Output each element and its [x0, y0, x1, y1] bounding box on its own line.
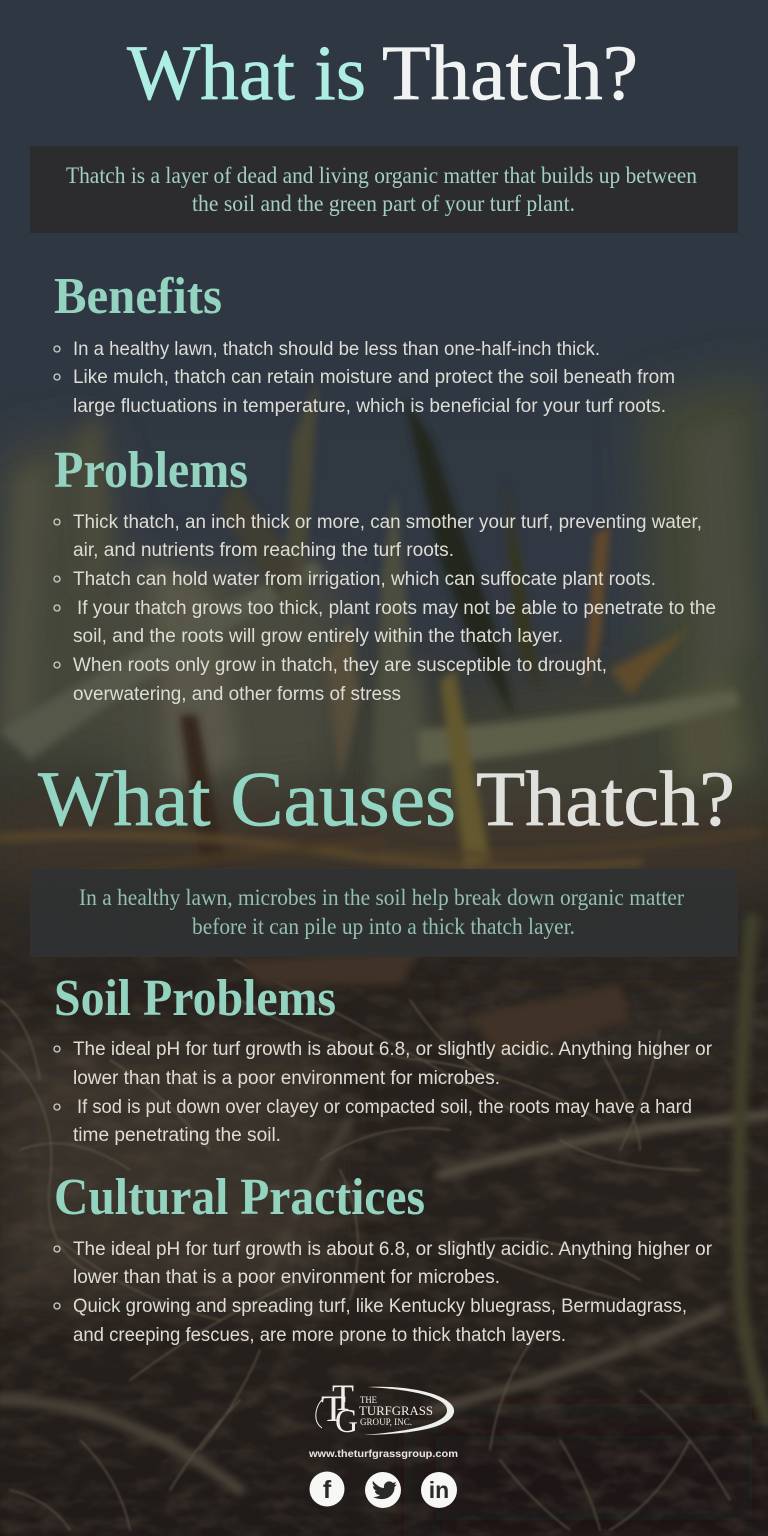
icon: twitter	[365, 1472, 401, 1508]
logo: The Turfgrass Group, Inc.	[316, 1378, 454, 1440]
panel: microbes explanation: In a healthy lawn, microbes in the soil help break down organic matter	[79, 885, 684, 910]
list: benefits: Like mulch, thatch can retain moisture and protect the soil beneath from	[73, 367, 675, 388]
logo: The Turfgrass Group, Inc.: GROUP, INC.	[360, 1418, 412, 1428]
title: What Causes Thatch?: What Causes	[38, 755, 456, 842]
list: cultural practices: lower than that is a poor environment for microbes.	[73, 1267, 500, 1288]
icon: facebook	[310, 1472, 344, 1506]
title: What Causes Thatch?: Thatch?	[476, 755, 735, 842]
title: What is Thatch?: Thatch?	[382, 29, 638, 116]
icon: linkedin	[421, 1472, 457, 1508]
panel: microbes explanation: before it can pile up into a thick thatch layer.	[192, 914, 575, 939]
list: problems: soil, and the roots will grow entirely within the thatch layer.	[73, 626, 563, 647]
list: cultural practices: Quick growing and spreading turf, like Kentucky bluegrass, Bermudagrass,	[73, 1296, 687, 1317]
list: benefits: large fluctuations in temperature, which is beneficial for your turf roots.	[73, 396, 666, 417]
heading: Benefits: Benefits	[54, 268, 222, 325]
logo: The Turfgrass Group, Inc.: TURFGRASS	[359, 1403, 433, 1418]
list: problems: overwatering, and other forms of stress	[73, 684, 401, 705]
title: What is Thatch?	[127, 29, 638, 116]
logo: The Turfgrass Group, Inc.: G	[335, 1403, 358, 1440]
panel: thatch definition: Thatch is a layer of dead and living organic matter that builds up between	[66, 163, 697, 188]
list: problems: Thick thatch, an inch thick or more, can smother your turf, preventing water,	[73, 512, 702, 533]
heading: Problems: Problems	[54, 442, 248, 499]
panel: thatch definition	[30, 146, 738, 233]
website url: www.theturfgrassgroup.com	[308, 1448, 458, 1460]
list: problems: When roots only grow in thatch, they are susceptible to drought,	[73, 655, 607, 676]
list: problems: air, and nutrients from reaching the turf roots.	[73, 540, 454, 561]
list: problems	[54, 512, 716, 705]
icon: linkedin: in	[429, 1477, 449, 1503]
panel: thatch definition: the soil and the green part of your turf plant.	[192, 191, 575, 216]
background: blurred turf and roots photo	[0, 374, 768, 1536]
title: What Causes Thatch?	[38, 755, 735, 842]
icon: facebook: f	[323, 1476, 332, 1504]
list: problems: If your thatch grows too thick, plant roots may not be able to penetrate to the	[77, 598, 716, 619]
list: cultural practices: The ideal pH for turf growth is about 6.8, or slightly acidic. Anything higher or	[73, 1239, 713, 1260]
list: benefits	[54, 339, 675, 417]
list: problems: Thatch can hold water from irrigation, which can suffocate plant roots.	[73, 569, 656, 590]
logo: The Turfgrass Group, Inc.: THE	[360, 1395, 377, 1405]
logo: The Turfgrass Group, Inc.: T	[332, 1378, 354, 1419]
list: soil problems: If sod is put down over clayey or compacted soil, the roots may have a hard	[77, 1097, 692, 1118]
list: soil problems	[54, 1039, 713, 1146]
list: soil problems: lower than that is a poor environment for microbes.	[73, 1068, 500, 1089]
list: cultural practices	[54, 1239, 713, 1346]
title: What is Thatch?: What is	[127, 29, 366, 116]
panel: microbes explanation	[30, 869, 738, 957]
list: soil problems: time penetrating the soil.	[73, 1125, 281, 1146]
heading: Soil Problems: Soil Problems	[54, 970, 336, 1027]
list: cultural practices: and creeping fescues, are more prone to thick thatch layers.	[73, 1325, 566, 1346]
logo: The Turfgrass Group, Inc.: T	[321, 1389, 346, 1430]
list: soil problems: The ideal pH for turf growth is about 6.8, or slightly acidic. Anything higher or	[73, 1039, 713, 1060]
heading: Cultural Practices: Cultural Practices	[54, 1169, 425, 1226]
list: benefits: In a healthy lawn, thatch should be less than one-half-inch thick.	[73, 339, 600, 360]
